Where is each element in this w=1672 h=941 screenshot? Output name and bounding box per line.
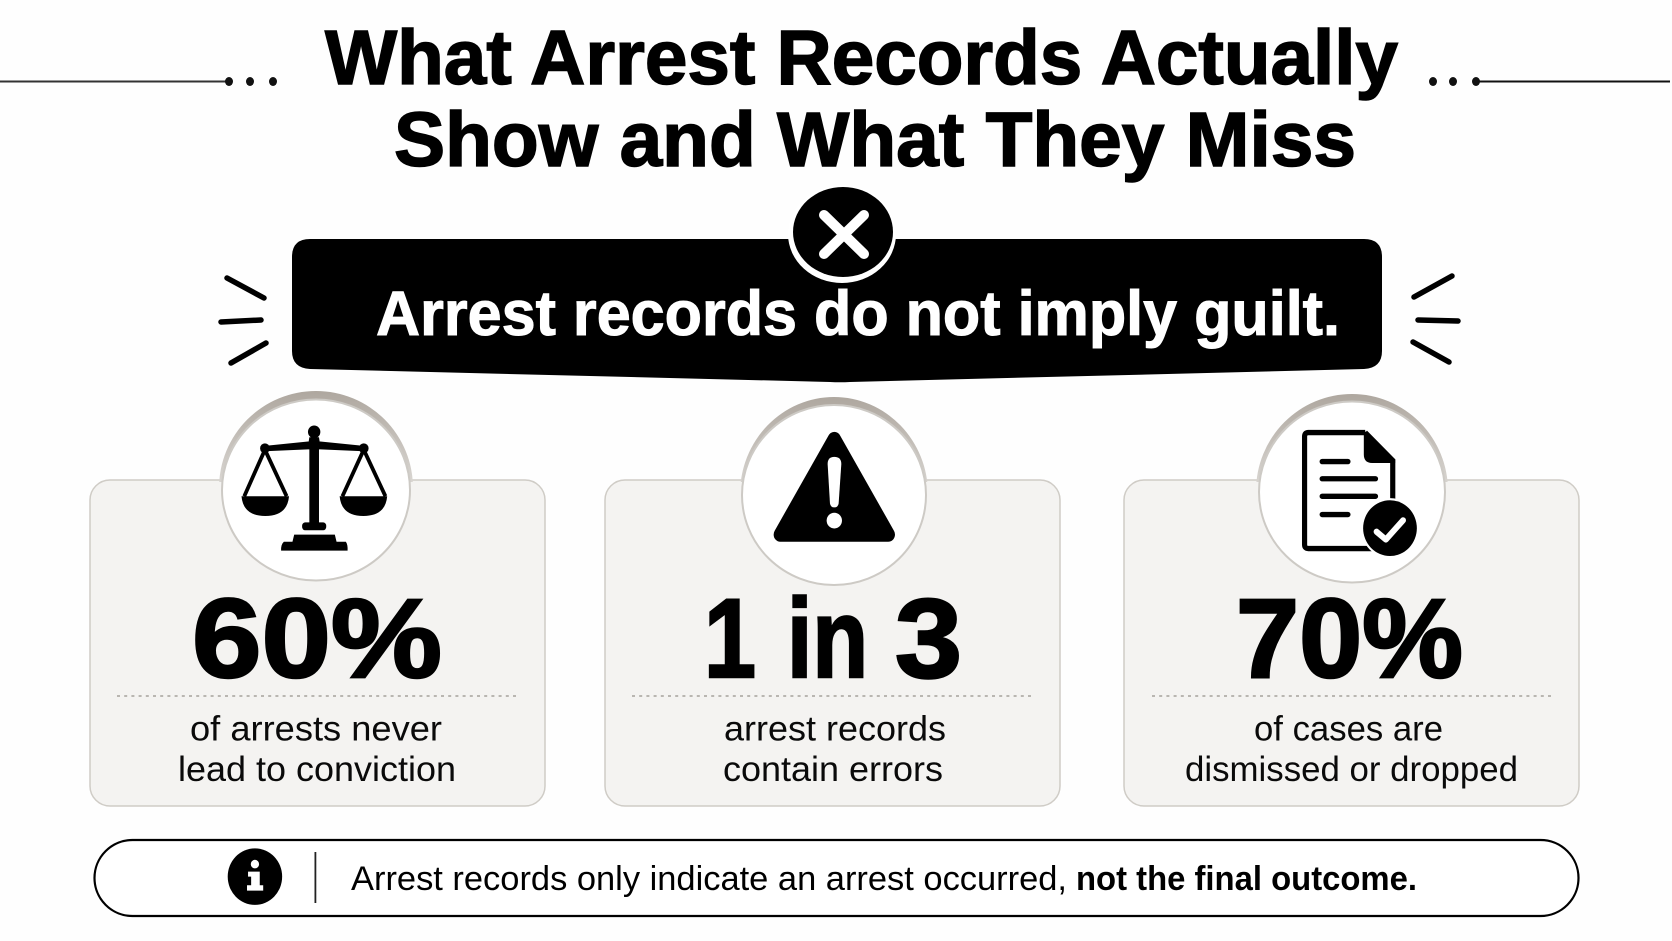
title: Show and What They Miss bbox=[394, 97, 1356, 183]
description bbox=[723, 710, 946, 789]
icon: warning triangle bbox=[780, 439, 888, 535]
note text: Arrest records only indicate an arrest occurred, bbox=[351, 860, 1067, 898]
banner: arrest records do not imply guilt: Arrest records do not imply guilt. bbox=[376, 279, 1340, 349]
note text: not the final outcome. bbox=[1076, 860, 1417, 898]
description bbox=[178, 710, 456, 789]
icon: x badge bbox=[788, 185, 896, 283]
callout: bottom note bbox=[94, 840, 1578, 916]
statistic: 1 bbox=[704, 576, 756, 701]
banner: arrest records do not imply guilt bbox=[292, 239, 1382, 382]
description: of cases are bbox=[1254, 710, 1443, 748]
left header rule with dots bbox=[0, 77, 277, 86]
panel: 1 in 3 bbox=[605, 397, 1060, 806]
statistic: 70% bbox=[1236, 576, 1463, 701]
title bbox=[325, 15, 1398, 183]
statistic: in bbox=[787, 576, 868, 701]
icon: document with check bbox=[1305, 430, 1419, 558]
title: What Arrest Records Actually bbox=[325, 15, 1398, 101]
note text bbox=[351, 860, 1417, 898]
icon: info bbox=[228, 848, 282, 905]
description: lead to conviction bbox=[178, 750, 456, 789]
description: of arrests never bbox=[190, 710, 442, 748]
statistic: 60% bbox=[192, 576, 442, 701]
left emphasis marks bbox=[221, 278, 266, 363]
statistic: 3 bbox=[895, 576, 962, 701]
right emphasis marks bbox=[1413, 276, 1458, 362]
right header rule with dots bbox=[1429, 77, 1670, 86]
icon: scales of justice bbox=[241, 425, 387, 551]
description: contain errors bbox=[723, 750, 943, 789]
panel: 60 percent bbox=[90, 391, 545, 806]
panel: 70 percent bbox=[1124, 394, 1579, 806]
description: dismissed or dropped bbox=[1185, 750, 1518, 789]
description bbox=[1185, 710, 1518, 789]
description: arrest records bbox=[724, 710, 946, 748]
